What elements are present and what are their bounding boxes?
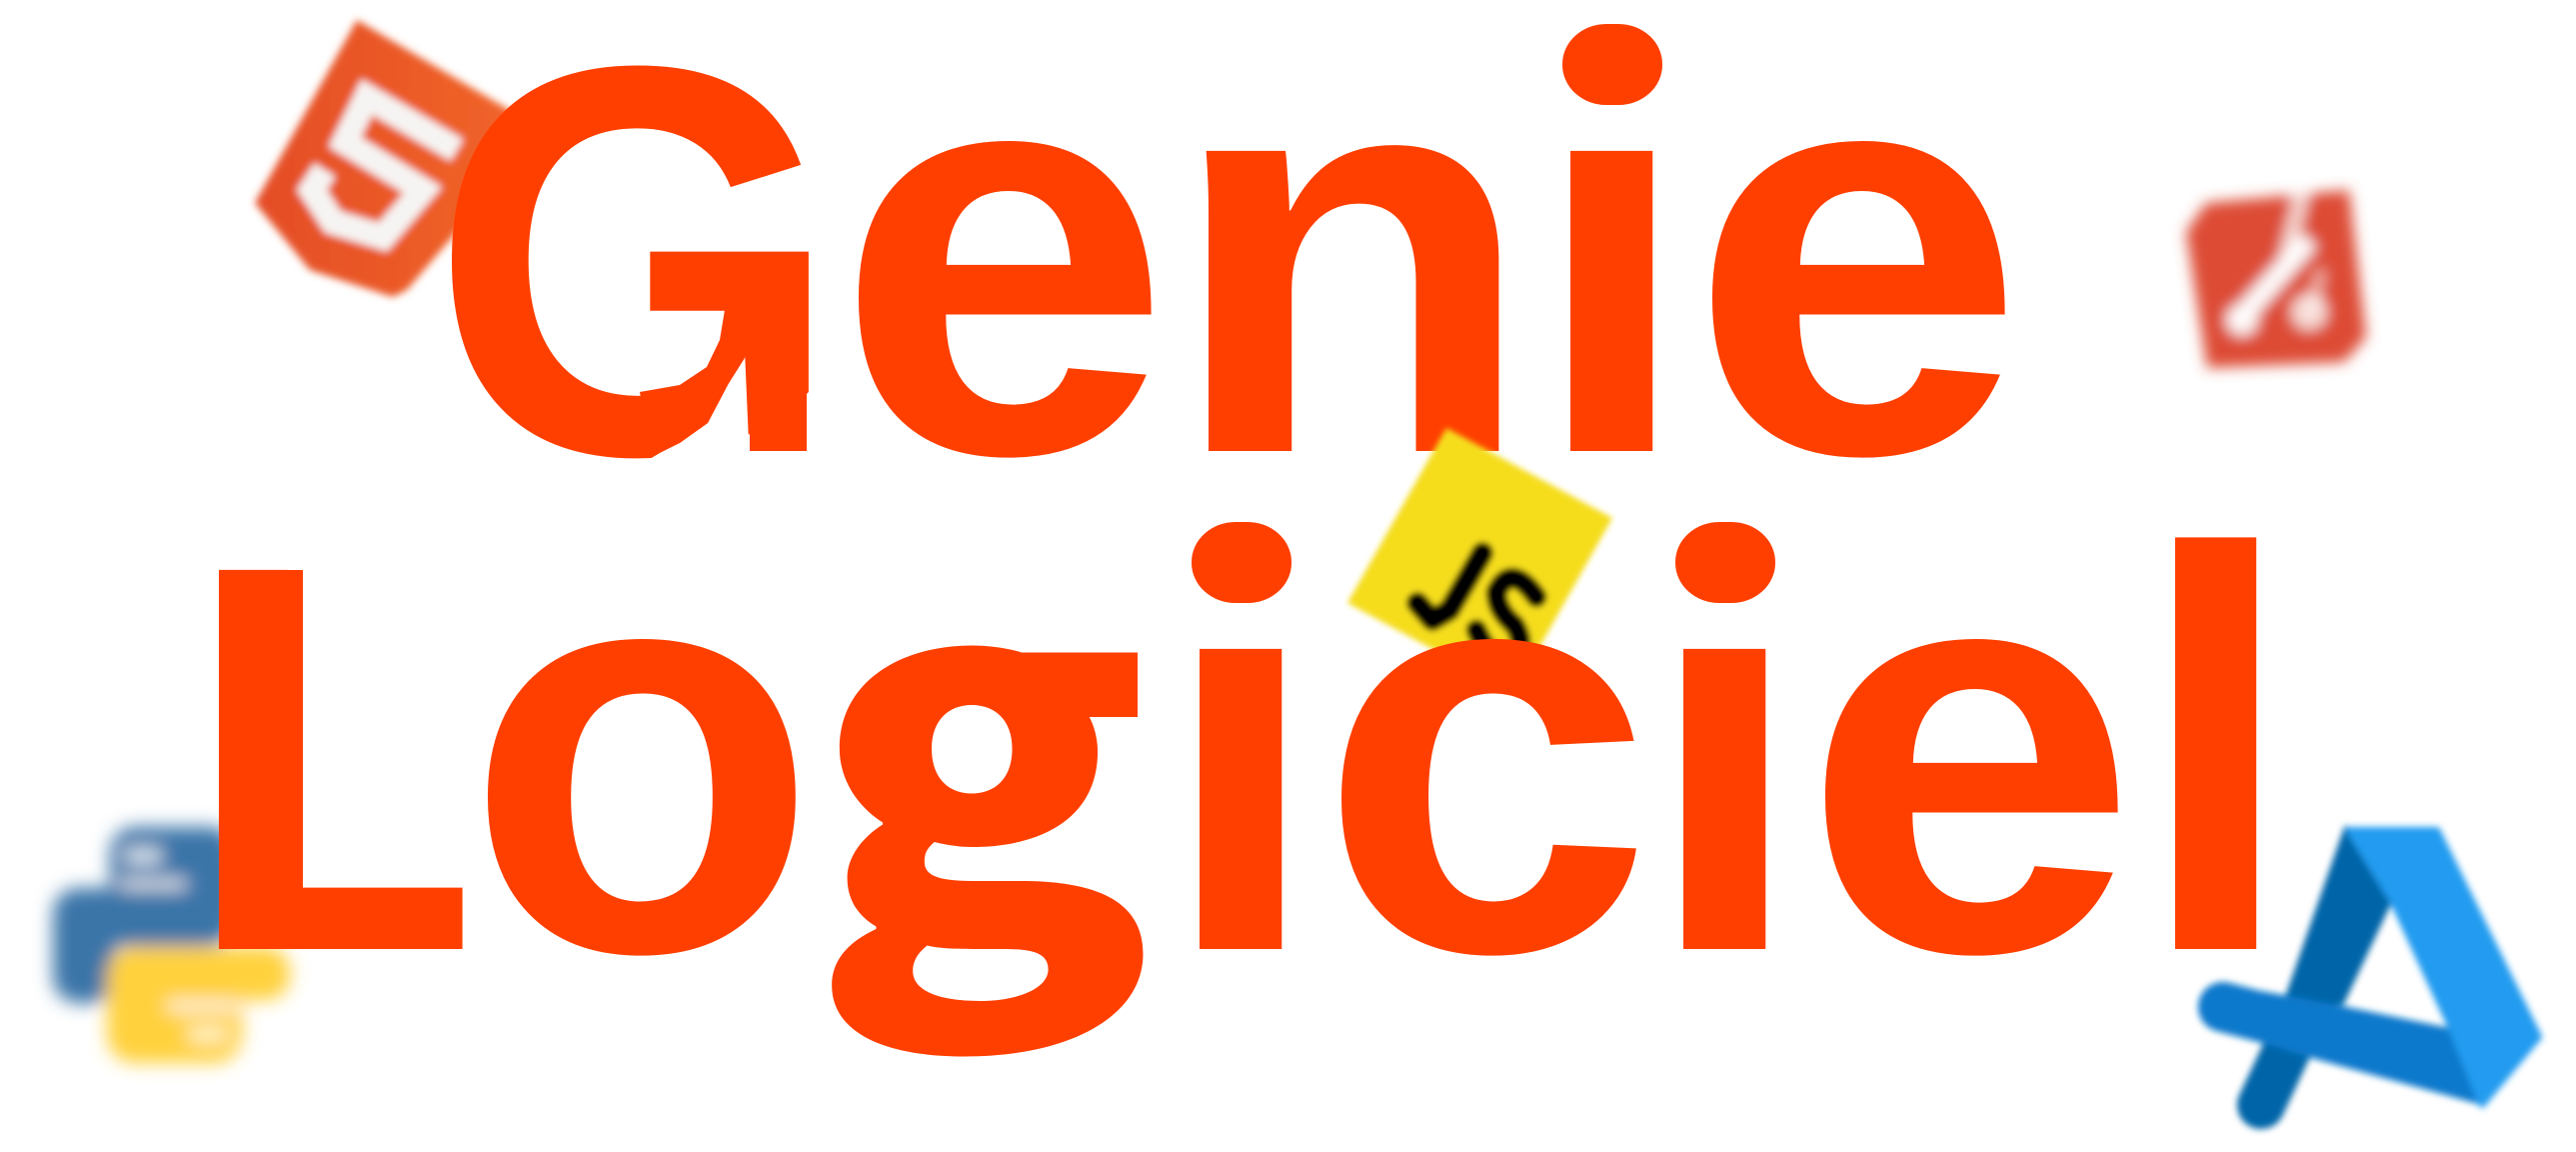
heading line: Logiciel: l (2134, 436, 2298, 1070)
heading line: Logiciel: e (1801, 428, 2138, 1073)
heading line: Logiciel: i (1641, 436, 1808, 1070)
icon: Git logo (2186, 190, 2366, 368)
icon: VS Code logo (2223, 828, 2539, 1105)
heading line: Logiciel: o (465, 428, 818, 1073)
heading line: Logiciel: i (1158, 436, 1324, 1070)
heading line: Logiciel: c (1317, 428, 1654, 1073)
icon: JavaScript badge (1347, 428, 1612, 693)
icon: Python logo (53, 827, 290, 1063)
heading line: Logiciel (187, 358, 2298, 1082)
heading line: Genie (430, 0, 2025, 575)
heading line: Logiciel: g (811, 358, 1153, 1082)
icon: HTML5 shield (255, 20, 530, 297)
heading line: Logiciel: L (187, 450, 477, 1066)
